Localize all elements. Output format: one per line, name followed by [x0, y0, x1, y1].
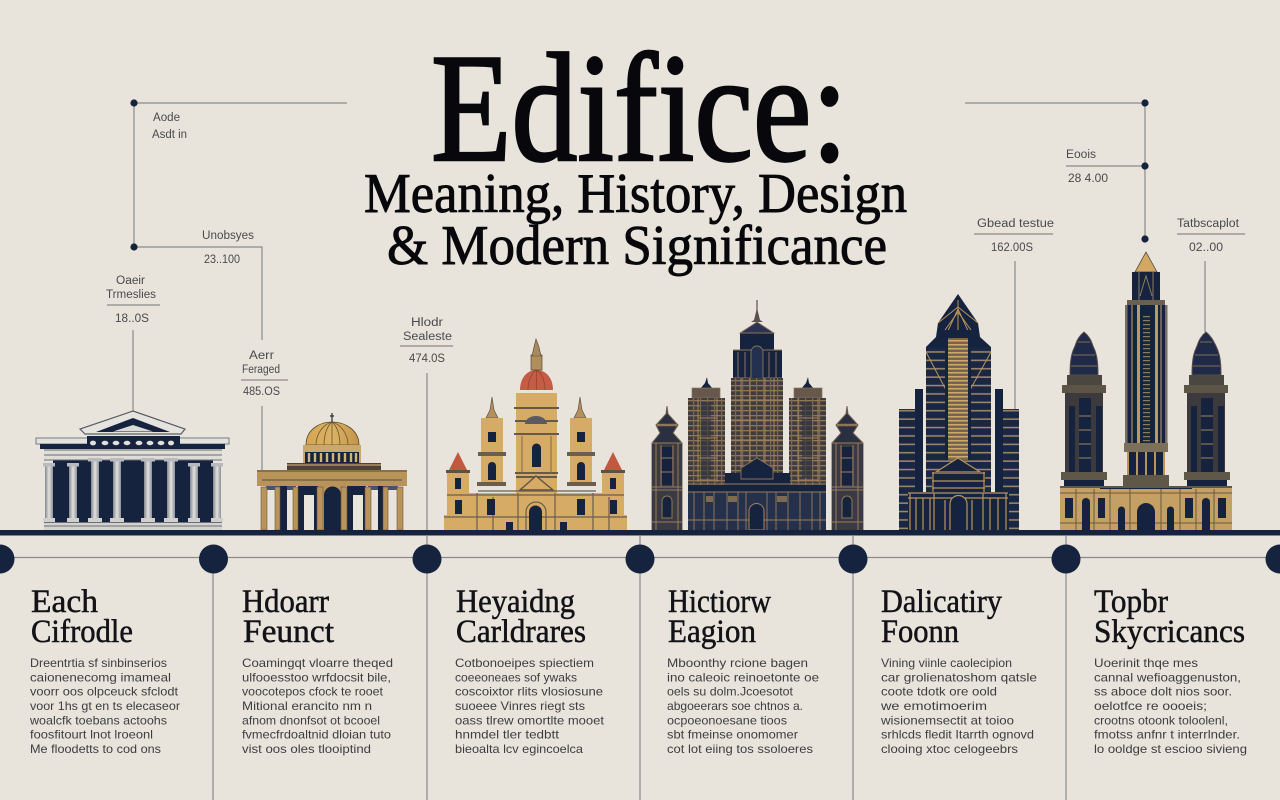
- column 6 body: crootns otoonk toloolenl,: [1094, 713, 1228, 727]
- label: upper right: 28 4.00: [1068, 173, 1108, 185]
- building: art deco skyscraper: [899, 294, 1019, 530]
- column 5 body: [880, 656, 1037, 756]
- label: domed hall: Aerr: [249, 350, 274, 362]
- label: second left: 23..100: [204, 254, 240, 266]
- label: skyscraper: 02..00: [1189, 242, 1223, 254]
- column 2 heading: Hdoarr: [242, 584, 329, 620]
- label: temple: Oaeir: [116, 275, 145, 287]
- column 1 body: woalcfk toebans actoohs: [29, 713, 167, 727]
- label: second left: Unobsyes: [202, 230, 254, 242]
- subtitle line two: & Modern Significance: [387, 215, 887, 277]
- column 3 body: Cotbonoeipes spiectiem: [455, 656, 594, 670]
- column 4: [667, 584, 819, 756]
- column 4 heading: [668, 584, 771, 650]
- column 3 body: bieoalta lcv egincoelca: [455, 742, 583, 756]
- column 2 body: [242, 656, 393, 756]
- label: art deco tower: Gbead testue: [977, 218, 1054, 230]
- column 3 heading: Heyaidng: [456, 584, 575, 620]
- column 6 body: ss aboce dolt nios soor.: [1094, 685, 1232, 699]
- label: temple: Trmeslies: [106, 289, 156, 301]
- column 1: [29, 584, 180, 756]
- label: domed hall: Feraged: [242, 364, 280, 376]
- column 3: [455, 584, 605, 756]
- column 4 heading: Eagion: [668, 614, 756, 650]
- label: art deco tower: 162.00S: [991, 242, 1033, 254]
- label: cathedral: Hlodr: [411, 317, 443, 329]
- column 3 body: hnmdel tler tedbtt: [455, 728, 560, 742]
- column 4 body: ocpoeonoesane tioos: [667, 713, 787, 727]
- column 5 heading: Dalicatiry: [881, 584, 1002, 620]
- title: [364, 22, 907, 277]
- label: art deco tower: [974, 218, 1054, 409]
- building: twin towers and skyscraper: [1060, 252, 1232, 530]
- label: second left: [202, 230, 254, 266]
- column 6 heading: Skycricancs: [1094, 614, 1245, 650]
- column 1 body: caionenecomg imameal: [30, 670, 171, 684]
- column 6 body: [1094, 656, 1247, 756]
- timeline: [0, 530, 1280, 800]
- column 2 heading: Feunct: [243, 614, 334, 650]
- far left turret: [652, 406, 682, 530]
- column 1 body: Me floodetts to cod ons: [30, 742, 161, 756]
- red dome: [520, 370, 553, 390]
- building: domed hall: [257, 413, 407, 530]
- cathedral side towers: [477, 397, 596, 486]
- title main word: Edifice:: [431, 22, 848, 194]
- central tower: [731, 300, 783, 480]
- left connector network: [130, 99, 347, 340]
- right twin tower: [1184, 332, 1230, 486]
- column 5 body: wisionemsectit at toioo: [880, 713, 1014, 727]
- deco base building: [908, 458, 1009, 530]
- label: domed hall: [241, 350, 288, 470]
- column 6 body: oelotfce re oooeis;: [1094, 699, 1207, 713]
- column 6 body: fmotss anfnr t interrlnder.: [1094, 728, 1240, 742]
- column 3 body: coeeoneaes sof ywaks: [455, 670, 577, 684]
- column 1 body: [29, 656, 180, 756]
- column 5: [880, 584, 1037, 756]
- column 5 heading: Foonn: [881, 614, 959, 650]
- column 5 body: Vining viinle caolecipion: [881, 656, 1012, 670]
- column 2 body: afnom dnonfsot ot bcooel: [242, 713, 380, 727]
- label: temple: [106, 275, 160, 412]
- far right turret: [832, 406, 863, 530]
- column 6 heading: [1094, 584, 1245, 650]
- temple columns: [43, 458, 223, 522]
- column 6 heading: Topbr: [1094, 584, 1168, 620]
- cluster base: [688, 458, 826, 530]
- column 1 heading: Cifrodle: [31, 614, 133, 650]
- column 5 body: coote tdotk ore oold: [881, 685, 997, 699]
- label: skyscraper: Tatbscaplot: [1177, 218, 1240, 230]
- column 5 body: srhlcds fledit Itarrth ognovd: [881, 728, 1034, 742]
- hall door: [324, 486, 341, 530]
- column 5 heading: [881, 584, 1002, 650]
- column 4 heading: Hictiorw: [668, 584, 771, 620]
- subtitle line one: Meaning, History, Design: [364, 163, 907, 225]
- column 3 body: coscoixtor rlits vlosiosune: [455, 685, 603, 699]
- building: gothic tower cluster: [652, 300, 863, 530]
- column 3 body: oass tlrew omortlte mooet: [455, 713, 605, 727]
- left twin tower: [1061, 332, 1107, 486]
- cathedral small turrets: [446, 452, 625, 494]
- column 2 body: fvmecfrdoaltnid dloian tuto: [242, 728, 391, 742]
- right tower: [789, 377, 826, 530]
- label: temple: 18..0S: [115, 313, 149, 325]
- column 1 body: foosfitourt lnot lroeonl: [30, 728, 153, 742]
- column 6: [1094, 584, 1247, 756]
- column 2 body: vist oos oles tlooiptind: [242, 742, 371, 756]
- column 5 body: car grolienatoshom qatsle: [881, 670, 1037, 684]
- label: cathedral: Sealeste: [403, 331, 452, 343]
- cathedral central tower: [514, 339, 559, 493]
- label: top left: [152, 112, 187, 141]
- column 5 body: we emotimoerim: [880, 699, 987, 713]
- column 2 body: Mitional erancito nm n: [242, 699, 372, 713]
- column 5 body: clooing xtoc celogeebrs: [881, 742, 1018, 756]
- column 6 body: lo ooldge st escioo sivieng: [1094, 742, 1247, 756]
- central spire: [1123, 252, 1169, 487]
- column 6 body: cannal wefioaggenuston,: [1094, 670, 1241, 684]
- cathedral door and windows: [455, 499, 617, 530]
- hall columns: [261, 487, 403, 530]
- main shaft: [926, 294, 991, 530]
- temple frieze: [87, 436, 180, 447]
- column 2: [242, 584, 393, 756]
- column 1 heading: [31, 584, 133, 650]
- label: top left: Asdt in: [152, 129, 187, 141]
- column 1 heading: Each: [31, 584, 99, 620]
- timeline nodes: [0, 544, 1280, 574]
- label: domed hall: 485.OS: [243, 386, 280, 398]
- column 3 heading: Carldrares: [456, 614, 586, 650]
- column 1 body: Dreentrtia sf sinbinserios: [30, 656, 167, 670]
- label: upper right: [1066, 149, 1108, 185]
- column 3 body: suoeee Vinres riegt sts: [455, 699, 585, 713]
- label: skyscraper: [1177, 218, 1245, 332]
- label: cathedral: [400, 317, 453, 530]
- column 4 body: [667, 656, 819, 756]
- column 4 body: Mboonthy rcione bagen: [667, 656, 808, 670]
- column 6 body: Uoerinit thqe mes: [1094, 656, 1198, 670]
- label: top left: Aode: [153, 112, 180, 124]
- column 4 body: oels su dolm.Jcoesotot: [667, 685, 794, 699]
- label: cathedral: 474.0S: [409, 353, 445, 365]
- building: baroque cathedral: [444, 339, 627, 530]
- column 4 body: sbt fmeinse onomomer: [667, 728, 798, 742]
- building: classical temple: [36, 411, 229, 530]
- column 1 body: voor 1hs gt en ts elecaseor: [30, 699, 180, 713]
- right connector network: [965, 99, 1149, 243]
- column 2 body: voocotepos cfock te rooet: [242, 685, 384, 699]
- column 1 body: voorr oos olpceuck sfclodt: [30, 685, 179, 699]
- column 4 body: cot lot eiing tos ssoloeres: [667, 742, 813, 756]
- timeline thin rule: [0, 535, 1280, 800]
- temple pediment: [80, 411, 185, 434]
- column 3 heading: [456, 584, 586, 650]
- dome: [306, 413, 359, 445]
- column 3 body: [455, 656, 605, 756]
- label: upper right: Eoois: [1066, 149, 1096, 161]
- column 2 body: ulfooesstoo wrfdocsit bile,: [242, 670, 391, 684]
- main gold base: [1060, 486, 1232, 530]
- outer wings: [899, 389, 1019, 530]
- column 4 body: abgoeerars soe chtnos a.: [667, 699, 803, 713]
- column 2 heading: [242, 584, 334, 650]
- timeline bar: [0, 530, 1280, 536]
- left tower: [688, 377, 725, 530]
- column 2 body: Coamingqt vloarre theqed: [242, 656, 393, 670]
- column 4 body: ino caleoic reinoetonte oe: [667, 670, 819, 684]
